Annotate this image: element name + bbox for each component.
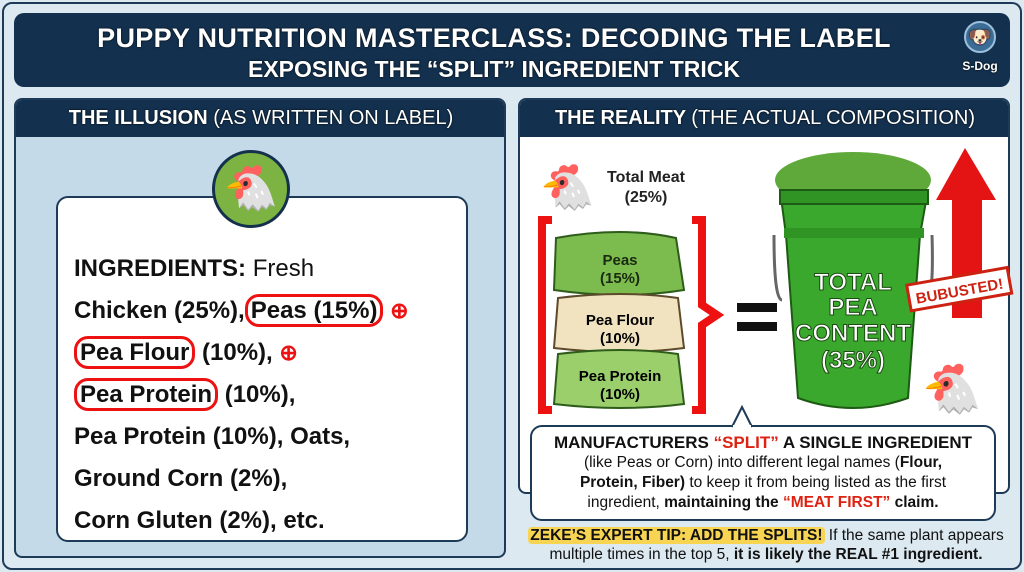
callout: split explanation: Protein, Fiber) to keep it from being listed as the first [580, 474, 946, 491]
sack: peas [554, 232, 684, 295]
ingredient label card: Pea Protein (10%), Oats, [74, 423, 350, 450]
sack: pea flour: (10%) [600, 330, 640, 347]
subtitle: EXPOSING THE “SPLIT” INGREDIENT TRICK [248, 56, 740, 82]
tip text: ZEKE’S EXPERT TIP: ADD THE SPLITS! If the same plant appears [530, 527, 1004, 544]
sack: pea flour: Pea Flour [586, 312, 654, 329]
bucket: total pea content: TOTAL [814, 269, 892, 296]
heading: the illusion: THE ILLUSION (AS WRITTEN ON LABEL) [69, 107, 453, 129]
callout: split explanation: MANUFACTURERS “SPLIT” A SINGLE INGREDIENT [554, 433, 972, 452]
icon: chicken bottom: 🐔 [922, 363, 982, 416]
bracket left [542, 220, 552, 410]
heading: the reality: THE REALITY (THE ACTUAL COMPOSITION) [555, 107, 975, 129]
ingredient label card: Pea Protein (10%), [80, 381, 295, 408]
text: total meat: (25%) [625, 189, 667, 206]
tip text [528, 527, 1004, 563]
sack: peas: Peas [602, 252, 638, 269]
stamp: bubusted: BUBUSTED! [915, 276, 1005, 308]
title: PUPPY NUTRITION MASTERCLASS: DECODING THE LABEL [97, 23, 891, 53]
panel: illusion [14, 98, 506, 558]
callout tail [732, 405, 752, 428]
sack: pea flour [554, 294, 684, 352]
bucket: total pea content: (35%) [821, 347, 885, 374]
logo: S-Dog [962, 21, 998, 74]
title banner [14, 13, 1010, 87]
icon: chicken top: 🐔 [540, 163, 595, 212]
ingredient label card: Ground Corn (2%), [74, 465, 287, 492]
stamp: bubusted [907, 267, 1012, 311]
text: total meat: Total Meat [607, 169, 686, 186]
sack: pea protein: (10%) [600, 386, 640, 403]
ingredient label card: Pea Flour (10%), ⊕ [80, 339, 298, 366]
bucket: total pea content: PEA [828, 294, 878, 321]
diagram: split ingredients [538, 148, 1014, 416]
ingredient label card: Chicken (25%),Peas (15%) ⊕ [74, 297, 409, 324]
ingredient label card: Corn Gluten (2%), etc. [74, 507, 325, 534]
bucket: total pea content: CONTENT [795, 320, 911, 347]
equals sign [737, 303, 777, 331]
sack: pea protein: Pea Protein [579, 368, 661, 385]
tip text: multiple times in the top 5, it is likely the REAL #1 ingredient. [549, 546, 983, 563]
icon: chicken circle [212, 150, 290, 228]
heading: the illusion [16, 100, 506, 137]
heading: the reality [520, 100, 1010, 137]
sack: pea protein [554, 350, 684, 408]
bracket right [692, 220, 717, 410]
callout: split explanation [530, 425, 996, 521]
panel: reality [518, 98, 1010, 494]
arrow: up red [936, 148, 996, 318]
sack: peas: (15%) [600, 270, 640, 287]
text: total meat [607, 169, 686, 206]
callout: split explanation: ingredient, maintaining the “MEAT FIRST” claim. [587, 494, 939, 511]
ingredient label card: INGREDIENTS: Fresh [74, 255, 314, 282]
callout: split explanation: (like Peas or Corn) into different legal names (Flour, [584, 454, 942, 471]
bucket: total pea content [774, 152, 932, 408]
logo: S-Dog: S-Dog [962, 59, 998, 73]
icon: chicken circle: 🐔 [224, 164, 278, 213]
logo: S-Dog: 🐶 [969, 27, 991, 47]
ingredient label card [56, 196, 468, 542]
